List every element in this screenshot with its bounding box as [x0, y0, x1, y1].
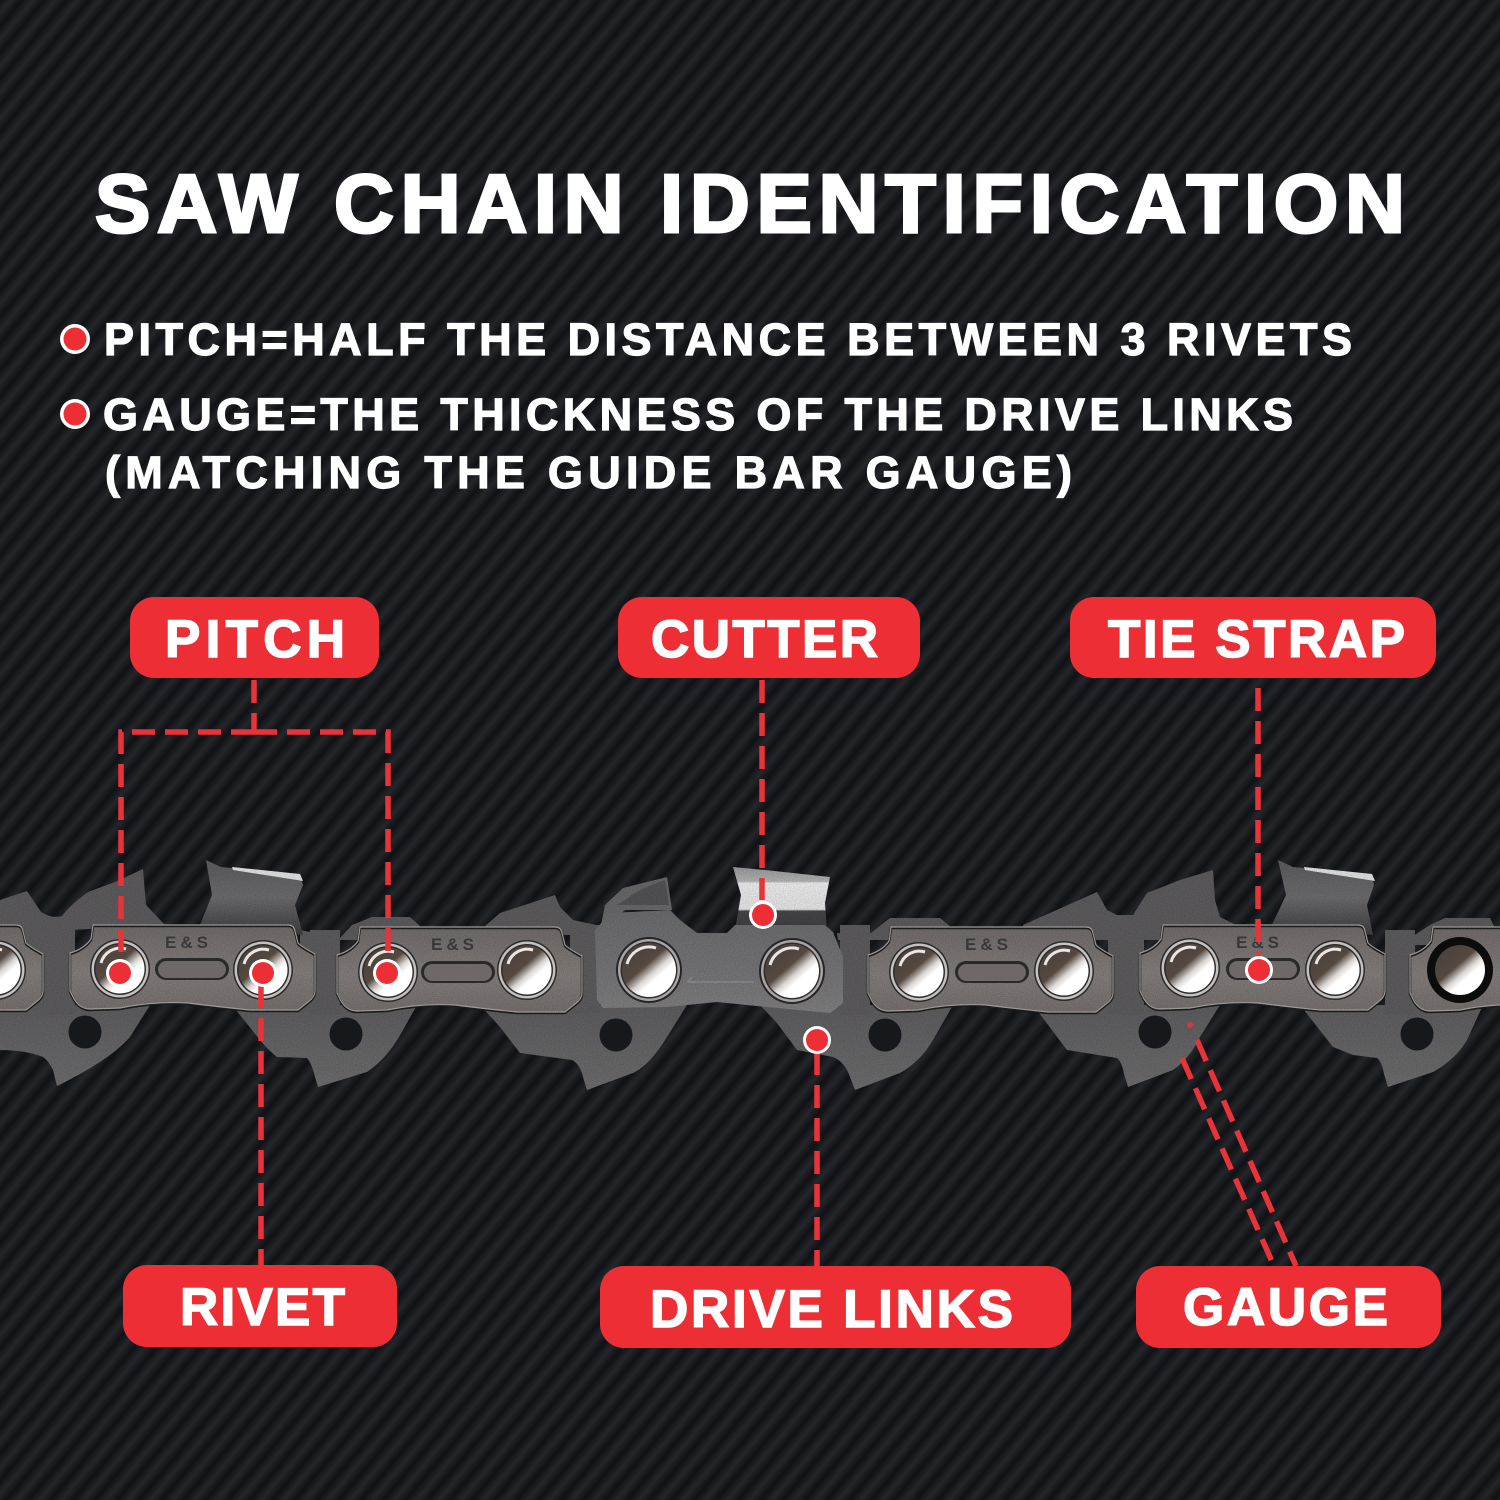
drive link holes [68, 1016, 1434, 1052]
pitch definition: PITCH=HALF THE DISTANCE BETWEEN 3 RIVETS [104, 314, 1352, 365]
label: rivet [123, 1265, 397, 1347]
brand stamps: E&S [431, 935, 478, 954]
marker dots [106, 901, 1273, 1054]
drive links upper and connectors [0, 869, 1497, 1015]
cutter leader [759, 680, 765, 900]
definitions text block [60, 314, 1352, 498]
brand stamps [165, 933, 1283, 954]
label: cutter: CUTTER [651, 610, 878, 669]
gauge definition [103, 389, 1293, 498]
rivets [0, 937, 1493, 1004]
label: gauge: GAUGE [1183, 1278, 1388, 1337]
tie strap leader [1255, 688, 1261, 958]
cutter side plate [595, 910, 843, 1013]
strap slots [155, 958, 1300, 983]
label: gauge [1136, 1266, 1441, 1348]
title: SAW CHAIN IDENTIFICATION [95, 157, 1405, 250]
rivet leader [258, 985, 264, 1266]
tie strap plates [0, 926, 1500, 1013]
saw chain illustration [0, 860, 1500, 1090]
label: tie strap: TIE STRAP [1108, 610, 1405, 669]
label: pitch: PITCH [165, 610, 345, 669]
brand stamps: E&S [965, 935, 1012, 954]
bullet: gauge [60, 399, 90, 429]
bullet: pitch [60, 324, 90, 354]
cutter teeth [200, 860, 1375, 935]
label: cutter [618, 597, 920, 678]
gauge definition: (MATCHING THE GUIDE BAR GAUGE) [105, 447, 1072, 498]
label: drive links [600, 1266, 1071, 1348]
drive links leader [814, 1052, 820, 1268]
brand stamps: E&S [1236, 933, 1283, 952]
gauge definition: GAUGE=THE THICKNESS OF THE DRIVE LINKS [103, 389, 1293, 440]
gauge leaders [1182, 1040, 1296, 1266]
brand stamps: E&S [165, 933, 212, 952]
label: drive links: DRIVE LINKS [650, 1280, 1013, 1339]
drive links lower teeth [0, 1005, 1483, 1090]
leader lines [121, 680, 1296, 1268]
pitch bracket leader [121, 680, 388, 958]
label: rivet: RIVET [180, 1278, 345, 1337]
label: tie strap [1070, 597, 1436, 678]
label: pitch [130, 597, 379, 678]
